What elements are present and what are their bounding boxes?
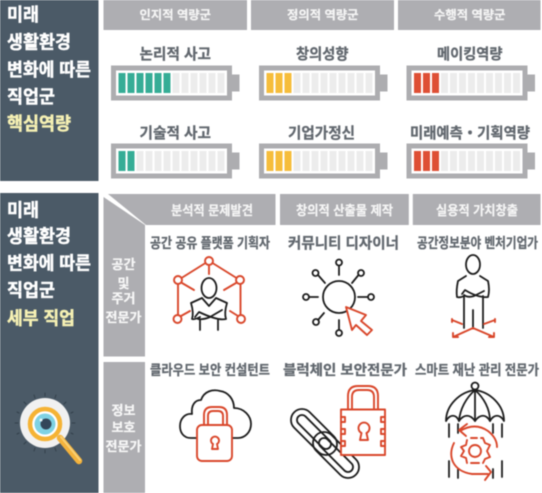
header: analytic problem finding: 분석적 문제발견	[171, 203, 253, 218]
icon: umbrella over gear	[446, 382, 504, 480]
icon: hub with cursor	[303, 260, 374, 336]
row label: information security experts: 정보	[112, 403, 135, 418]
sidebar title: detailed jobs: 직업군	[7, 280, 55, 300]
row label: information security experts: 보호	[112, 420, 135, 435]
job: community designer: 커뮤니티 디자이너	[288, 235, 399, 252]
sidebar title: core competencies: 미래	[7, 5, 39, 25]
column header: 정의적 역량군	[287, 8, 358, 22]
battery: making: 메이킹역량	[437, 46, 503, 63]
sidebar title: core competencies: 직업군	[7, 87, 55, 107]
icon: chain with padlock	[286, 386, 385, 483]
battery: technical thinking	[111, 125, 240, 178]
column header	[104, 0, 247, 30]
battery: creativity: 창의성향	[296, 46, 349, 63]
panel: core competencies sidebar	[0, 0, 98, 181]
sidebar title: core competencies: 핵심역량	[7, 114, 71, 134]
sidebar title: detailed jobs: 미래	[7, 200, 39, 220]
column header: 수행적 역량군	[434, 7, 506, 22]
job: blockchain security expert	[283, 362, 407, 483]
icon: standing person with arrows	[452, 255, 495, 337]
header: creative output production: 창의적 산출물 제작	[296, 203, 393, 218]
battery: logical thinking: 논리적 사고	[140, 46, 211, 63]
header: creative output production	[280, 194, 409, 225]
column header: 인지적 역량군	[140, 8, 211, 22]
row label: space and housing experts: 주거	[112, 291, 135, 306]
battery: entrepreneurship: 기업가정신	[288, 125, 355, 142]
battery: logical thinking	[111, 46, 240, 100]
panel: performance competency column	[398, 0, 540, 178]
row label: space and housing experts	[104, 197, 145, 356]
column header	[398, 0, 540, 30]
job: geospatial venture founder	[417, 235, 538, 337]
row label: information security experts: 전문가	[106, 439, 141, 454]
row label: space and housing experts: 전문가	[106, 310, 141, 325]
row label: space and housing experts: 공간	[112, 257, 135, 272]
icon: cloud with padlock	[180, 390, 251, 461]
job: space sharing platform planner	[150, 235, 270, 330]
header: practical value creation: 실용적 가치창출	[436, 203, 518, 218]
job: smart disaster management expert	[415, 362, 539, 480]
matrix corner and column headers	[104, 194, 540, 493]
panel: cognitive competency column	[104, 0, 247, 178]
sidebar title: detailed jobs: 세부 직업	[7, 308, 75, 328]
battery: foresight and planning: 미래예측・기획역량	[410, 125, 530, 142]
icon: magnifying glass with eye	[15, 393, 80, 461]
sidebar title: core competencies: 변화에 따른	[7, 60, 91, 80]
battery: entrepreneurship	[259, 125, 388, 178]
battery: making	[406, 46, 535, 100]
icon: person in network	[174, 257, 245, 330]
job: cloud security consultant: 클라우드 보안 컨설턴트	[150, 362, 270, 378]
job: blockchain security expert: 블럭체인 보안전문가	[283, 362, 407, 378]
sidebar title: detailed jobs: 생활환경	[7, 226, 71, 246]
battery: foresight and planning	[406, 125, 535, 178]
header: practical value creation	[413, 194, 540, 225]
row label: information security experts	[104, 362, 145, 493]
job: space sharing platform planner: 공간 공유 플랫폼 기획자	[150, 235, 270, 251]
row label: space and housing experts: 및	[118, 276, 130, 291]
sidebar title: detailed jobs	[7, 200, 91, 328]
sidebar title: core competencies: 생활환경	[7, 32, 71, 52]
job: community designer	[288, 235, 399, 336]
battery: creativity	[259, 46, 388, 100]
panel: detailed jobs sidebar	[0, 193, 98, 493]
job: cloud security consultant	[150, 362, 270, 461]
sidebar title: detailed jobs: 변화에 따른	[7, 254, 91, 274]
battery: technical thinking: 기술적 사고	[140, 125, 211, 142]
panel: affective competency column	[251, 0, 394, 178]
sidebar title: core competencies	[7, 5, 91, 134]
header: analytic problem finding	[108, 194, 276, 225]
column header	[251, 0, 394, 30]
